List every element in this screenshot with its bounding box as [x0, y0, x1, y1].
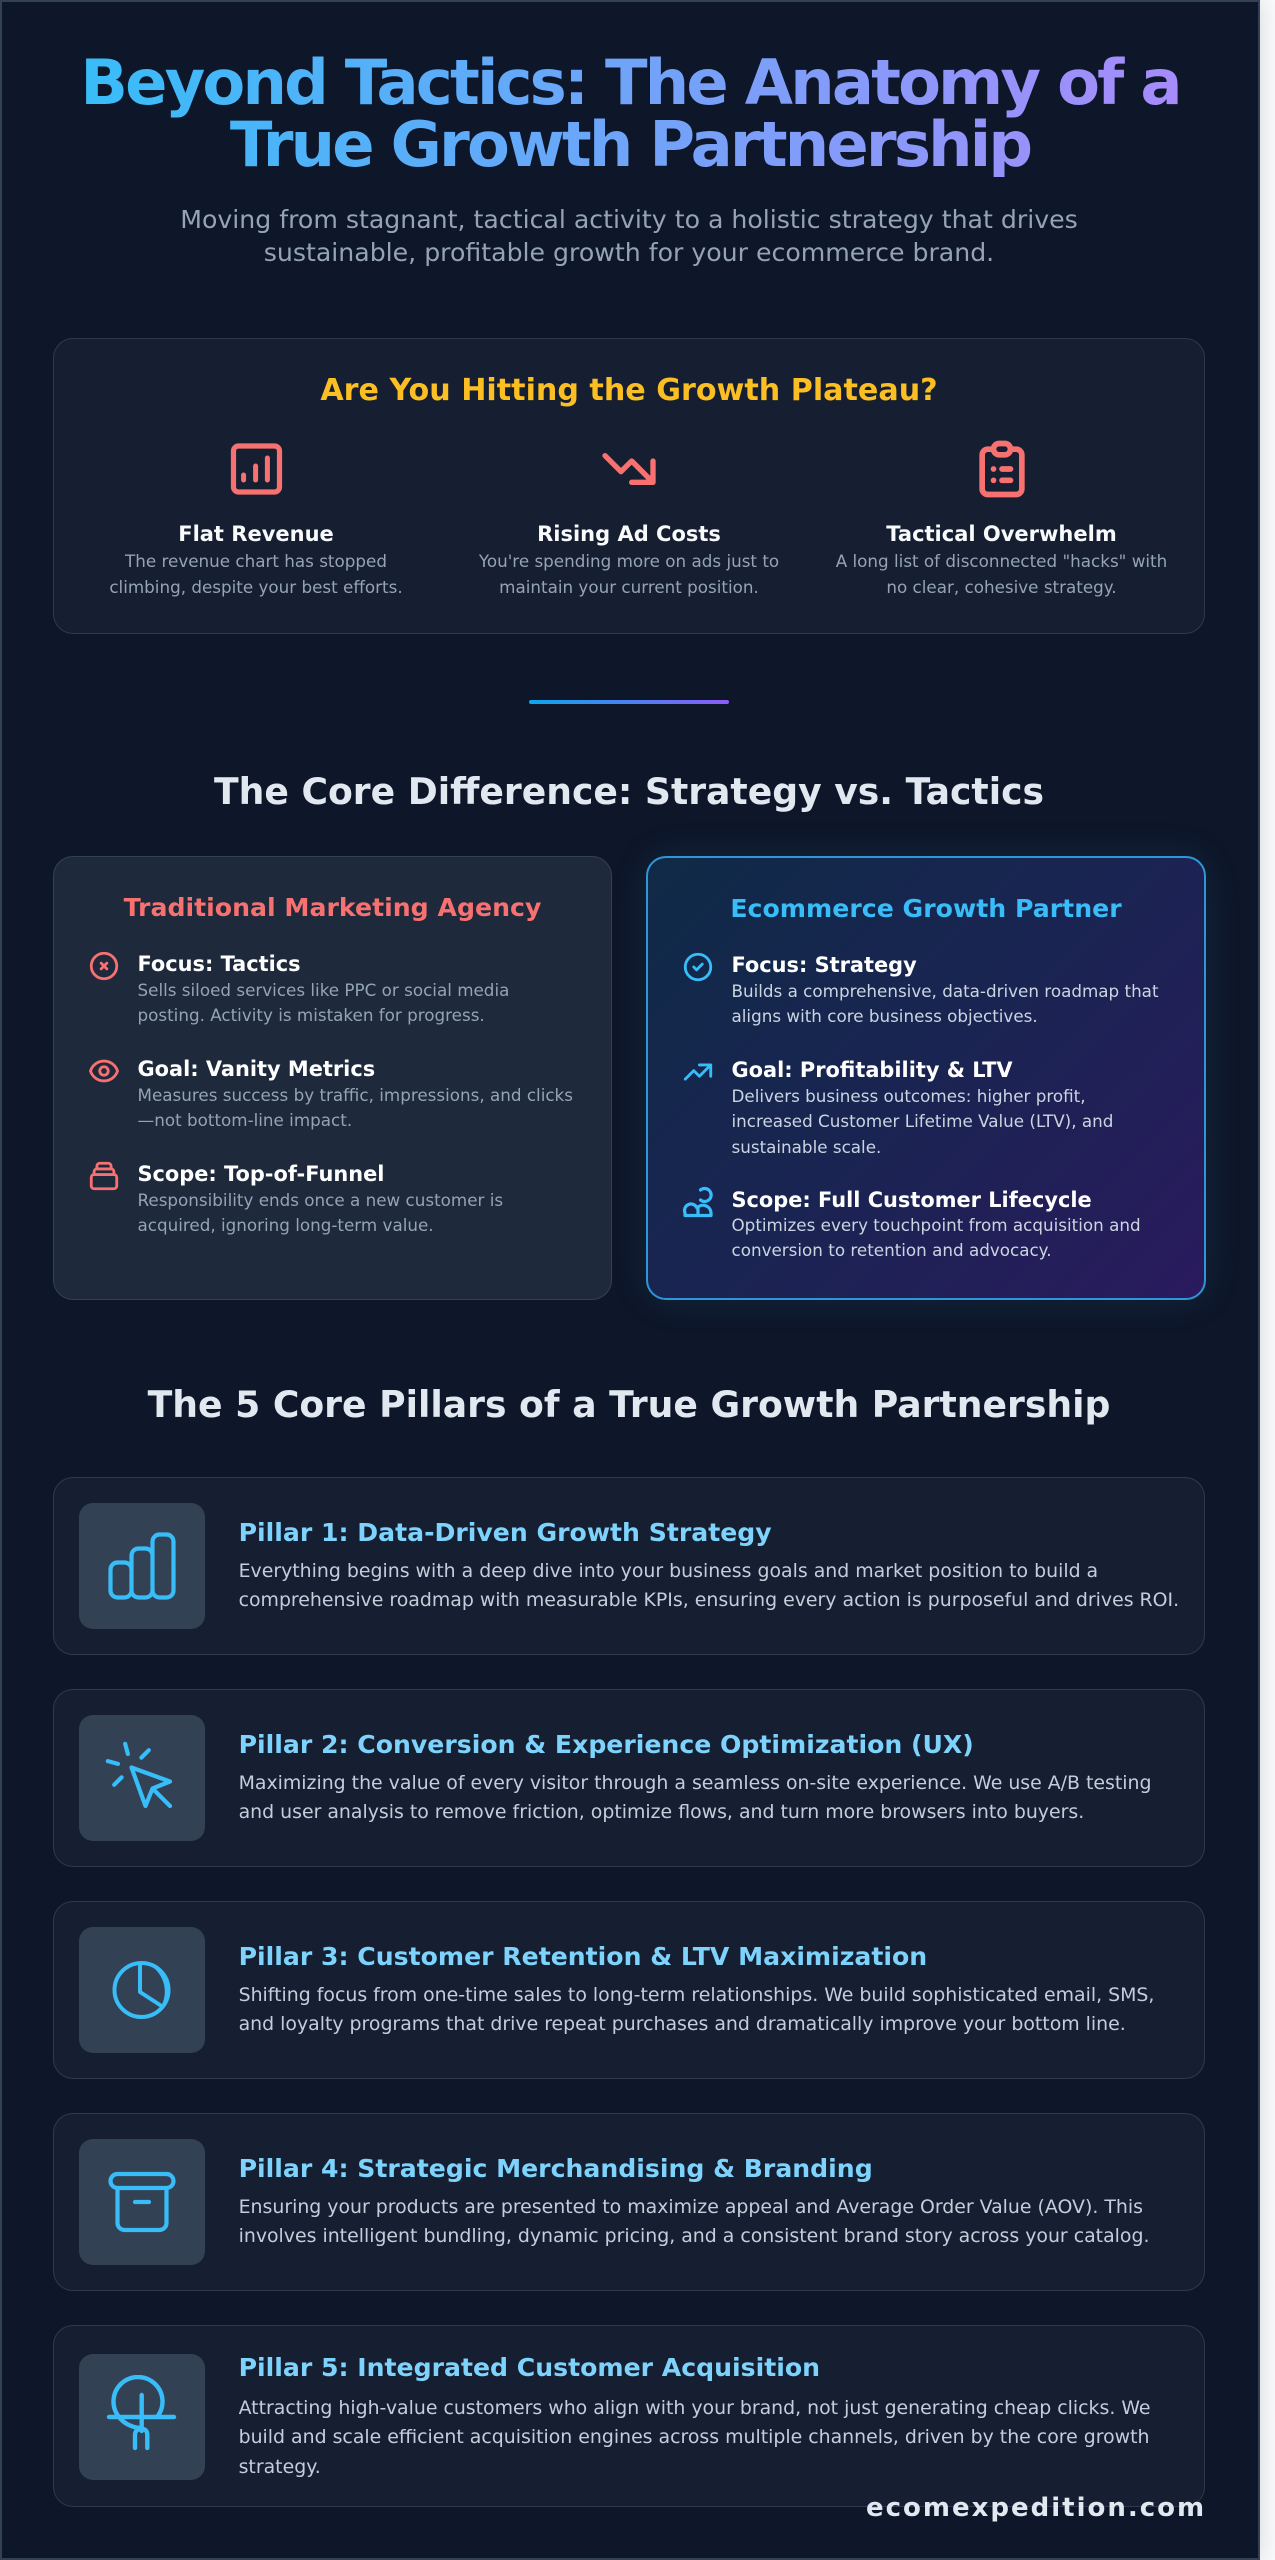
panel: growth plateau — [53, 338, 1205, 634]
pillar description: comprehensive roadmap with measurable KPIs, ensuring every action is purposeful and drives ROI. — [239, 1589, 1179, 1611]
item title: Tactical Overwhelm — [886, 522, 1117, 546]
icon: clipboard list — [979, 440, 1025, 498]
panel heading: Traditional Marketing Agency — [124, 893, 541, 922]
subtitle — [180, 205, 1078, 267]
pillar description: strategy. — [239, 2456, 321, 2478]
icon: stacked layers — [90, 1162, 118, 1190]
pillar description — [238, 2396, 1151, 2478]
pillar description: Everything begins with a deep dive into your business goals and market position to build a — [239, 1560, 1098, 1582]
icon: customers — [682, 1186, 713, 1218]
panel: traditional marketing agency — [53, 856, 612, 1300]
subtitle: Moving from stagnant, tactical activity to a holistic strategy that drives — [180, 205, 1078, 234]
icon: archive box — [79, 2139, 205, 2265]
item: scope lifecycle — [682, 1186, 1141, 1260]
item description: Sells siloed services like PPC or social media — [138, 980, 509, 1000]
pillar description — [239, 2196, 1149, 2247]
item description: Responsibility ends once a new customer is — [138, 1190, 503, 1210]
item description: You're spending more on ads just to — [479, 551, 779, 571]
item title: Scope: Top-of-Funnel — [138, 1162, 384, 1186]
item description: maintain your current position. — [499, 576, 759, 596]
item title: Focus: Strategy — [732, 953, 917, 977]
icon: bar chart — [79, 1503, 205, 1629]
item: goal vanity metrics — [89, 1057, 573, 1130]
pillar 5 — [53, 2325, 1205, 2507]
item title: Goal: Profitability & LTV — [732, 1058, 1012, 1082]
icon: x circle — [90, 952, 118, 980]
icon: trending up — [684, 1063, 712, 1081]
item description: no clear, cohesive strategy. — [886, 576, 1117, 596]
item description: sustainable scale. — [732, 1137, 881, 1157]
item title: Focus: Tactics — [138, 952, 301, 976]
pillar 1 — [53, 1477, 1205, 1655]
pillar description: Attracting high-value customers who align with your brand, not just generating cheap clicks. We — [239, 2396, 1151, 2418]
item description: conversion to retention and advocacy. — [732, 1240, 1052, 1260]
icon: pie chart — [79, 1927, 205, 2053]
pillar title: Pillar 4: Strategic Merchandising & Branding — [239, 2154, 873, 2183]
item description: increased Customer Lifetime Value (LTV), and — [732, 1111, 1113, 1131]
item description — [138, 1085, 573, 1130]
plateau item: rising ad costs — [478, 453, 779, 596]
pillar description: Shifting focus from one-time sales to long-term relationships. We build sophisticated email, SMS, — [239, 1984, 1154, 2006]
pillar description: Ensuring your products are presented to maximize appeal and Average Order Value (AOV). This — [239, 2196, 1143, 2218]
item description — [732, 981, 1159, 1026]
item description — [138, 980, 509, 1025]
pillar title: Pillar 3: Customer Retention & LTV Maximization — [239, 1942, 927, 1971]
item description: Measures success by traffic, impressions, and clicks — [138, 1085, 573, 1105]
item: goal profitability — [684, 1058, 1113, 1157]
item title: Flat Revenue — [178, 522, 334, 546]
item description: —not bottom-line impact. — [138, 1110, 352, 1130]
pillar description — [239, 1984, 1154, 2035]
pillar description: involves intelligent bundling, dynamic pricing, and a consistent brand story across your catalog. — [239, 2225, 1149, 2247]
plateau heading: Are You Hitting the Growth Plateau? — [320, 373, 938, 408]
item description: climbing, despite your best efforts. — [109, 576, 403, 596]
pillar title: Pillar 1: Data-Driven Growth Strategy — [239, 1518, 772, 1547]
item description: Builds a comprehensive, data-driven roadmap that — [732, 981, 1159, 1001]
item description — [732, 1215, 1141, 1260]
pillar description: build and scale efficient acquisition engines across multiple channels, driven by the core growth — [239, 2426, 1149, 2448]
subtitle: sustainable, profitable growth for your ecommerce brand. — [264, 238, 994, 267]
icon: trending down — [602, 453, 656, 485]
icon: target figure — [79, 2354, 205, 2480]
item description — [478, 551, 779, 596]
pillar title: Pillar 2: Conversion & Experience Optimization (UX) — [239, 1730, 974, 1759]
panel heading: Ecommerce Growth Partner — [730, 894, 1122, 923]
pillar description — [239, 1560, 1179, 1611]
plateau item: flat revenue — [109, 443, 403, 596]
item description: The revenue chart has stopped — [125, 551, 387, 571]
item description — [836, 551, 1167, 596]
pillar description: Maximizing the value of every visitor through a seamless on-site experience. We use A/B testing — [239, 1772, 1152, 1794]
icon: cursor click — [79, 1715, 205, 1841]
pillar 2 — [53, 1689, 1205, 1867]
item: scope top of funnel — [90, 1162, 503, 1235]
heading: five pillars: The 5 Core Pillars of a True Growth Partnership — [148, 1382, 1110, 1426]
title: Beyond Tactics: The Anatomy of a — [80, 46, 1180, 119]
item title: Rising Ad Costs — [537, 522, 721, 546]
item title: Goal: Vanity Metrics — [138, 1057, 375, 1081]
item description: aligns with core business objectives. — [732, 1006, 1038, 1026]
footer brand: ecomexpedition.com — [866, 2493, 1206, 2523]
item description: Delivers business outcomes: higher profit, — [732, 1086, 1086, 1106]
title — [80, 52, 1180, 177]
item: focus tactics — [90, 952, 509, 1025]
item description — [732, 1086, 1113, 1157]
pillar title: Pillar 5: Integrated Customer Acquisition — [239, 2353, 820, 2382]
title: True Growth Partnership — [230, 108, 1030, 181]
item description: acquired, ignoring long-term value. — [138, 1215, 434, 1235]
item description: posting. Activity is mistaken for progress. — [138, 1005, 485, 1025]
item: focus strategy — [684, 952, 1159, 1026]
pillar description — [239, 1772, 1152, 1823]
icon: eye — [89, 1060, 119, 1082]
icon: bar chart in square — [230, 443, 282, 495]
item title: Scope: Full Customer Lifecycle — [732, 1188, 1092, 1212]
heading: core difference: The Core Difference: Strategy vs. Tactics — [214, 770, 1044, 813]
pillar description: and loyalty programs that drive repeat purchases and dramatically improve your bottom line. — [239, 2013, 1126, 2035]
plateau item: tactical overwhelm — [836, 440, 1167, 596]
item description — [138, 1190, 503, 1235]
item description — [109, 551, 403, 596]
pillar description: and user analysis to remove friction, optimize flows, and turn more browsers into buyers. — [239, 1801, 1084, 1823]
panel: ecommerce growth partner — [646, 856, 1206, 1300]
pillar 4 — [53, 2113, 1205, 2291]
item description: Optimizes every touchpoint from acquisition and — [732, 1215, 1141, 1235]
icon: check circle — [684, 952, 712, 982]
pillar 3 — [53, 1901, 1205, 2079]
item description: A long list of disconnected "hacks" with — [836, 551, 1167, 571]
